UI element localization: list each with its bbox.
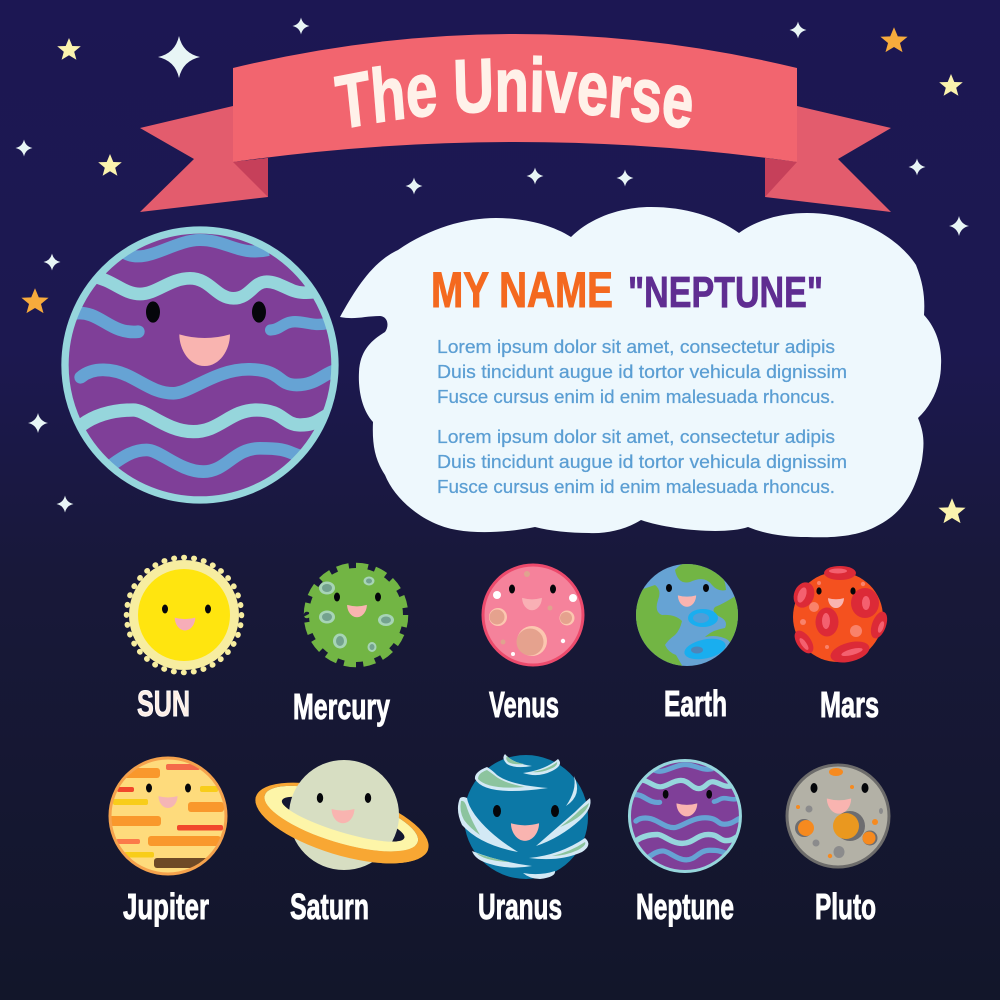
Pluto xyxy=(787,765,889,867)
Venus label: Venus xyxy=(489,684,559,725)
Uranus xyxy=(458,754,591,879)
Jupiter xyxy=(108,758,226,874)
bubble heading: "NEPTUNE" xyxy=(628,268,823,317)
bubble text: Fusce cursus enim id enim malesuada rhoncus. xyxy=(437,387,835,407)
bubble text: Lorem ipsum dolor sit amet, consectetur adipis xyxy=(437,427,835,447)
Earth label: Earth xyxy=(664,683,727,724)
Mars xyxy=(790,566,890,666)
stars xyxy=(16,18,969,523)
Mercury xyxy=(307,566,405,664)
Jupiter label: Jupiter xyxy=(123,886,209,927)
bubble text: Fusce cursus enim id enim malesuada rhoncus. xyxy=(437,477,835,497)
bubble text: Duis tincidunt augue id tortor vehicula dignissim xyxy=(437,452,847,472)
bubble heading xyxy=(431,262,823,318)
Uranus label: Uranus xyxy=(478,886,562,927)
Saturn label: Saturn xyxy=(290,886,369,927)
Mars label: Mars xyxy=(820,684,879,725)
large Neptune character xyxy=(65,230,337,500)
bubble text xyxy=(437,337,847,497)
Earth xyxy=(636,564,738,666)
title ribbon xyxy=(140,34,891,212)
Neptune label: Neptune xyxy=(636,886,734,927)
Saturn xyxy=(255,760,429,870)
Mercury label: Mercury xyxy=(293,686,390,727)
bubble text: Duis tincidunt augue id tortor vehicula dignissim xyxy=(437,362,847,382)
Venus xyxy=(483,565,583,665)
small Neptune xyxy=(629,761,741,871)
Sun xyxy=(126,558,242,672)
Pluto label: Pluto xyxy=(815,886,876,927)
bubble text: Lorem ipsum dolor sit amet, consectetur adipis xyxy=(437,337,835,357)
title: The Universe xyxy=(334,55,692,128)
title xyxy=(334,55,692,128)
speech bubble xyxy=(340,207,941,537)
bubble heading: MY NAME xyxy=(431,262,613,318)
Sun label: SUN xyxy=(137,683,190,724)
